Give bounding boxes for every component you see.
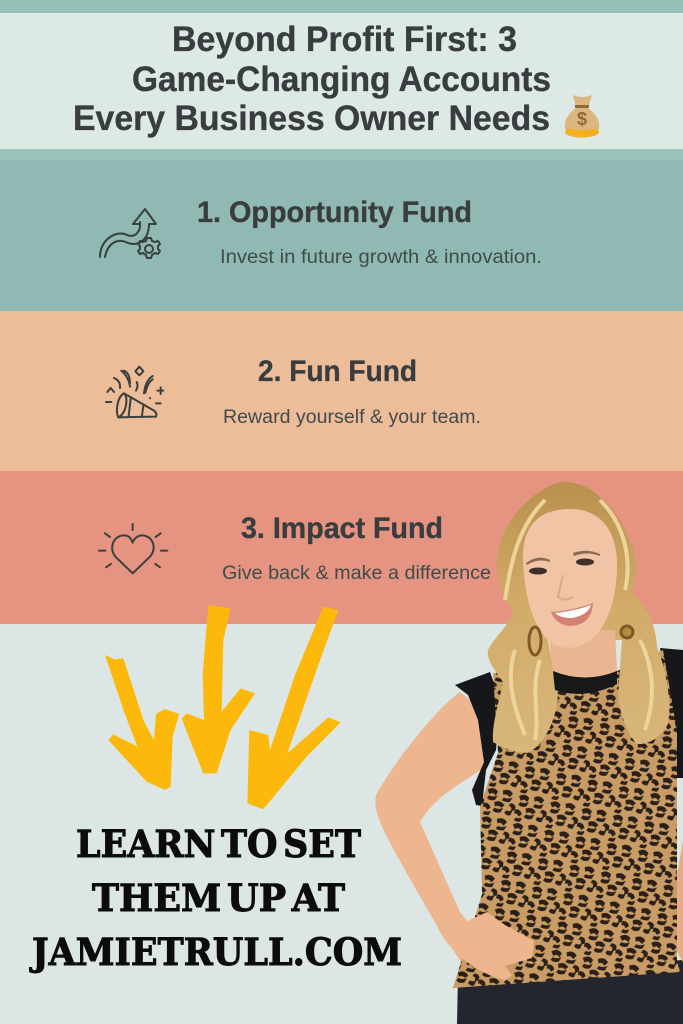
left sleeve: [455, 672, 500, 806]
call to action text: LEARN TO SET: [76, 822, 361, 866]
collar: [553, 671, 617, 694]
hair: [488, 482, 669, 753]
background: top strip: [0, 0, 683, 13]
eyes and brows: [526, 551, 600, 574]
neck: [548, 630, 617, 678]
text: opportunity fund description: Invest in future growth & innovation.: [220, 247, 542, 268]
heading: fun fund: 2. Fun Fund: [258, 355, 417, 388]
hair highlights: [505, 500, 652, 740]
heading: opportunity fund: 1. Opportunity Fund: [197, 196, 472, 229]
leopard top: [453, 650, 680, 988]
arrows: three yellow hand-drawn arrows: [105, 605, 341, 809]
smile: [551, 603, 593, 626]
title: Game-Changing Accounts: [132, 60, 551, 99]
text: fun fund description: Reward yourself & your team.: [223, 407, 481, 428]
jeans: [457, 960, 683, 1024]
panel: impact fund: [0, 471, 683, 624]
panel: fun fund: [0, 311, 683, 471]
call to action text: [29, 822, 402, 974]
photo: woman in leopard top: [375, 482, 683, 1024]
icon: growth arrow and gear: [100, 209, 160, 258]
panel: opportunity fund: [0, 149, 683, 311]
left hand: [437, 912, 534, 980]
icon: money bag: $: [577, 109, 587, 129]
left arm: [375, 692, 495, 965]
nose: [558, 575, 573, 600]
title: Every Business Owner Needs: [73, 99, 550, 138]
title: Beyond Profit First: 3: [172, 20, 517, 59]
text: impact fund description: Give back & make a difference: [222, 563, 491, 584]
right sleeve: [660, 648, 683, 778]
right arm: [672, 840, 683, 962]
icon: money bag: [565, 95, 599, 138]
panel: title background: [0, 13, 683, 149]
icon: party popper: [106, 367, 163, 417]
face: [523, 509, 617, 648]
heading: impact fund: 3. Impact Fund: [241, 512, 443, 545]
call to action text: THEM UP AT: [92, 876, 345, 920]
title: [73, 20, 551, 138]
icon: heart with rays: [99, 524, 167, 573]
panel: lower call to action background: [0, 624, 683, 1024]
earrings: [529, 626, 633, 655]
call to action text: JAMIETRULL.COM: [29, 930, 402, 974]
